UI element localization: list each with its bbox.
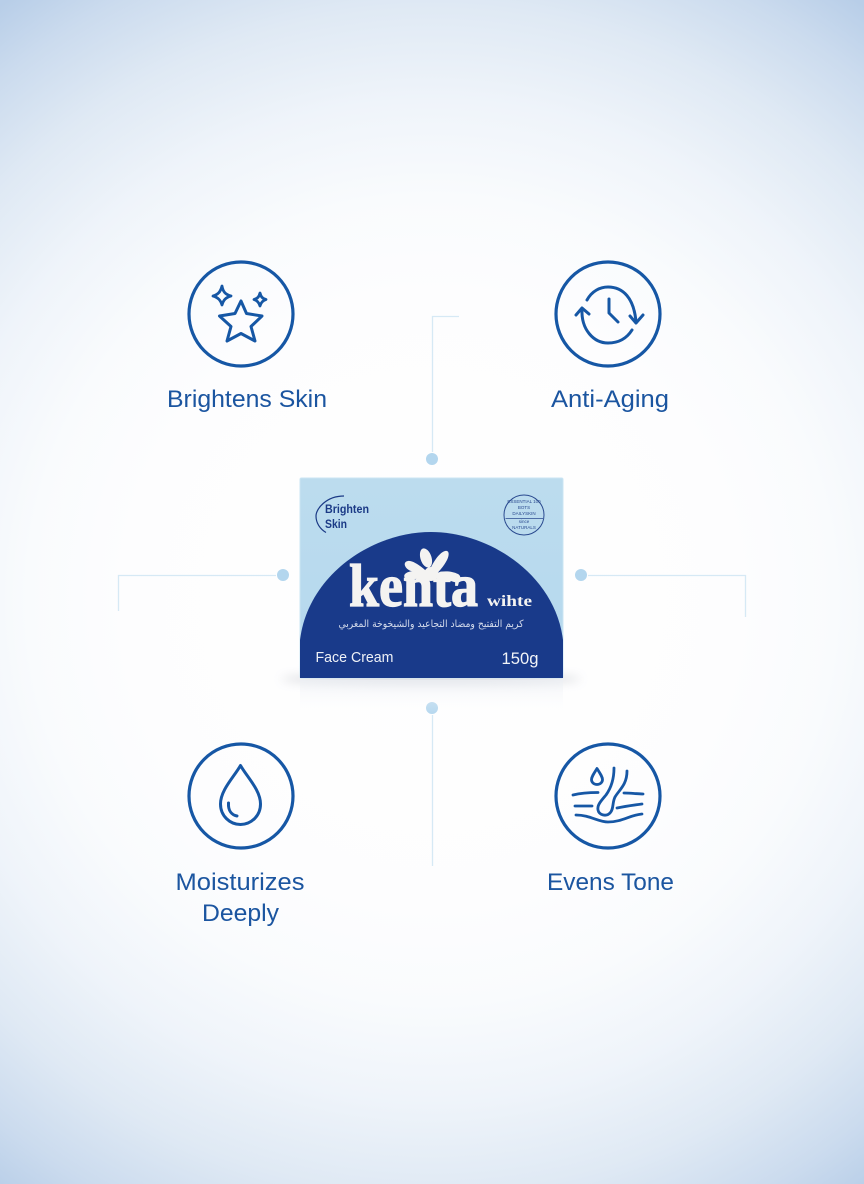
icon: clock with cycle arrows [556,262,660,366]
seal badge: BOTS [518,505,530,510]
label: Anti-Aging [551,386,669,413]
logo suffix: wihte: wihte [487,593,532,610]
seal badge: DAILYSKIN [512,511,536,516]
navy arch [300,532,563,678]
feature: Brightens Skin [167,262,327,413]
seal badge: since [519,519,530,524]
connector: right [575,569,746,617]
logo: kenta: kenta [349,553,478,619]
arabic description: كريم التفتيح ومضاد التجاعيد والشيخوخة المغربي [338,619,524,630]
feature: Moisturizes Deeply: Deeply [202,900,279,927]
connector: top [426,316,459,465]
product: face cream box [281,478,581,716]
label: Brightens Skin [167,386,327,413]
logo splash [404,547,460,582]
seal badge: NATURALS [512,525,536,530]
label: Evens Tone [547,869,674,896]
feature: Moisturizes Deeply [176,744,304,927]
tag: Brighten Skin [316,496,369,532]
connector: bottom [426,702,438,866]
icon: star with sparkles [189,262,293,366]
seal badge [504,495,544,535]
feature: Anti-Aging [551,262,669,413]
tag: Brighten Skin: Skin [325,517,347,531]
label: Moisturizes [176,869,304,896]
icon: skin layers with hair and droplet [556,744,660,848]
tag: Brighten Skin: Brighten [325,502,369,516]
box front panel [300,478,563,678]
feature: Evens Tone [547,744,674,896]
seal badge: ESSENTIAL 100 [507,499,541,504]
label: Face Cream: Face Cream [316,649,394,666]
icon: water drop [189,744,293,848]
label: 150g: 150g [502,649,538,668]
connector: left [118,569,289,611]
